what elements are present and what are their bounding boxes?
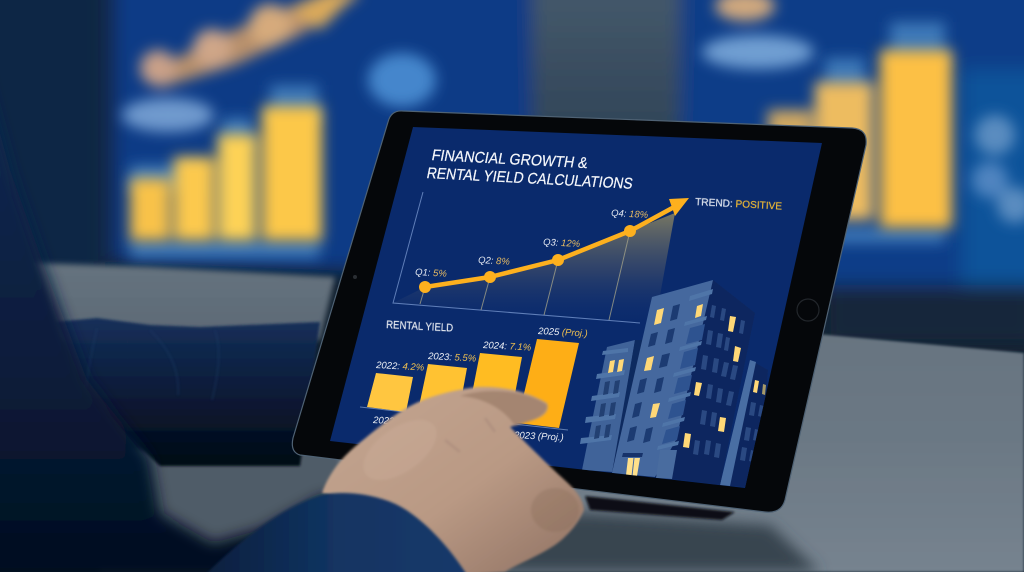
- small right building: [720, 360, 768, 488]
- bar value labels: 2023: 5.5%: [427, 351, 477, 365]
- hand shape: [322, 387, 584, 572]
- tablet stand: [585, 496, 735, 520]
- tablet home button: [797, 299, 819, 321]
- sleeve folds: [86, 328, 219, 400]
- table surface: [33, 263, 1024, 572]
- bar value labels: [372, 326, 588, 444]
- bars: [367, 339, 579, 428]
- main building lit windows: [644, 304, 741, 448]
- line chart: [393, 192, 782, 323]
- blurred bars right: [702, 0, 1024, 228]
- ground floor door: [656, 450, 677, 479]
- bar value labels: 2022: 4.2%: [375, 360, 425, 374]
- growth trend line: [425, 206, 676, 287]
- main entrance: [622, 453, 643, 476]
- quarter labels: Q4: 18%: [611, 208, 649, 221]
- bar value labels: 2024: 7.1%: [482, 340, 532, 354]
- sleeve: arm resting behind tablet: [55, 318, 320, 466]
- title: FINANCIAL GROWTH &: [430, 147, 590, 172]
- bar value labels: 2025 (Proj.): [537, 326, 588, 340]
- shirt body foreground: [0, 60, 470, 572]
- blurred trend line left: [122, 0, 436, 132]
- arrow head: [669, 198, 689, 216]
- main building dim side windows: [693, 305, 745, 458]
- bar value labels: 2022: [372, 415, 395, 427]
- table shadow under tablet and hand: [470, 512, 820, 572]
- chart drop lines: [420, 231, 630, 320]
- bar baseline: [360, 407, 568, 430]
- tablet: [292, 111, 866, 520]
- small left building: [580, 340, 645, 475]
- quarter labels: Q1: 5%: [415, 267, 448, 280]
- chart area fill: [400, 214, 675, 300]
- chart axes: [393, 192, 640, 323]
- main building front face: [612, 280, 713, 477]
- tablet body: [292, 111, 866, 512]
- quarter labels: Q2: 8%: [478, 255, 511, 268]
- data points: [419, 225, 636, 293]
- knuckle highlights: [353, 408, 447, 492]
- shirt cuff: [205, 493, 467, 572]
- title: RENTAL YIELD CALCULATIONS: [425, 165, 634, 193]
- main building front windows: [627, 304, 680, 443]
- main building right face: [655, 280, 755, 485]
- title: [427, 149, 633, 189]
- hand touching screen: [322, 387, 584, 572]
- blurred bar halos: [130, 22, 945, 258]
- building illustration: [580, 280, 768, 488]
- tablet camera: [353, 275, 357, 279]
- background: blurred wall screens: [0, 0, 1024, 345]
- bar value labels: 2023 (Proj.): [513, 430, 564, 444]
- bar chart heading: RENTAL YIELD: [386, 319, 453, 335]
- quarter labels: [415, 208, 649, 280]
- screen content: [360, 147, 782, 488]
- trend label: TREND: POSITIVE: [695, 196, 782, 213]
- quarter labels: Q3: 12%: [543, 237, 581, 250]
- tablet screen: [330, 127, 822, 488]
- finger shading: [460, 391, 547, 426]
- bar chart: rental yield: [360, 319, 588, 444]
- blurred bars left: [130, 106, 322, 241]
- main building balconies: [657, 289, 713, 450]
